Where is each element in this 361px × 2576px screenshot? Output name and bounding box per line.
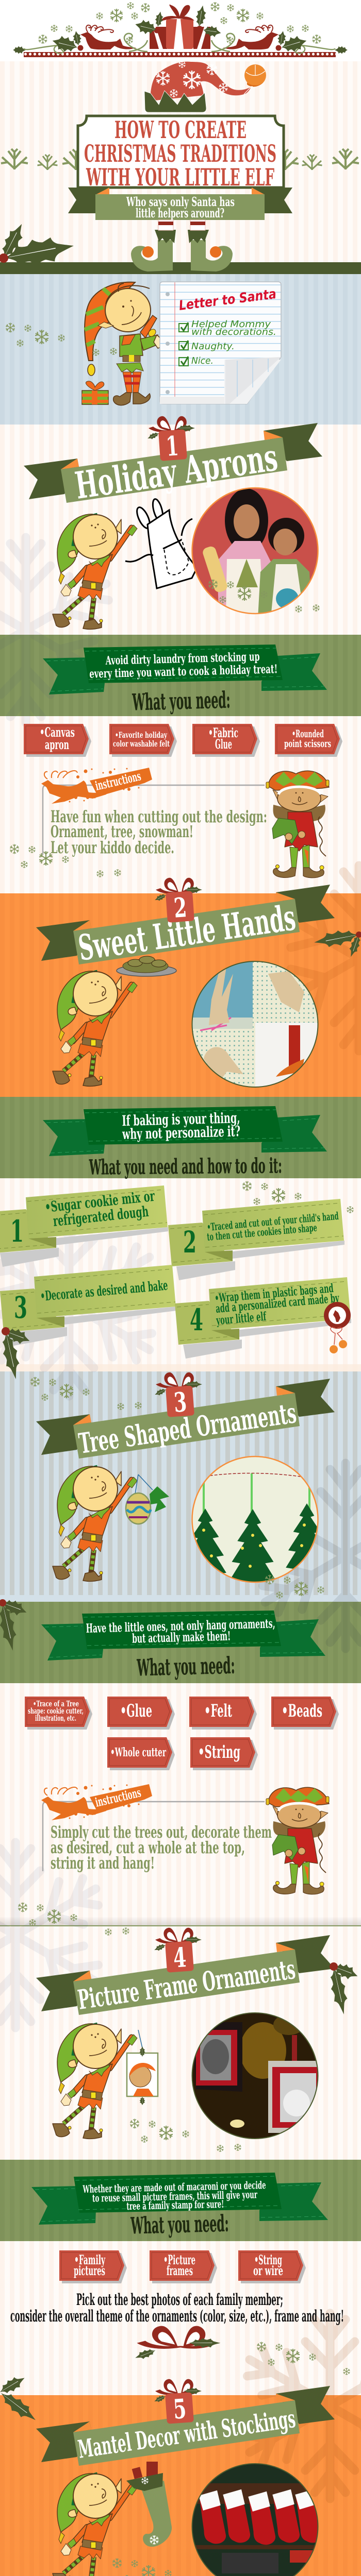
checklist [179,319,276,366]
infographic canvas: What you need: [132,687,231,716]
icon: large bow [133,2326,220,2362]
step 1: refrigerated dough [52,1203,150,1230]
step 2: 2 [183,1225,196,1260]
snowflakes [5,323,117,356]
section 1 intro ribbon: Avoid dirty laundry from stocking up [105,650,260,668]
letter to Santa [160,282,281,404]
icon: holly [313,927,361,958]
checklist: Nice. [191,355,214,366]
section 1 instructions [41,768,267,857]
section 3 material tags: illustration, etc. [35,1714,76,1723]
section 4 material tags: •Family [74,2252,106,2267]
checklist: with decorations. [191,327,276,337]
step 4: 4 [190,1302,203,1337]
section 3 material tags: •Beads [282,1701,322,1721]
section 4 number gift [153,1928,202,1974]
icon: small gift [82,381,108,404]
step 1: •Sugar cookie mix or [44,1188,156,1216]
section 4 intro ribbon [31,2173,328,2225]
elf with apron [53,514,137,629]
icon: wax seal with bells [324,1302,351,1353]
section 3 material tags: •String [198,1742,240,1762]
jester elf [266,771,329,878]
photo: girls in aprons [192,487,319,618]
subtitle ribbon: Who says only Santa has [126,194,235,209]
section 4 material tags: •Picture [163,2252,195,2267]
snowflakes [208,579,320,613]
section 3 instructions [41,1784,272,1873]
snowflakes [30,1377,142,1410]
section 2 intro ribbon [43,1106,327,1156]
section 1 material tags: •Favorite holiday [115,730,167,740]
snowflake [343,2368,350,2375]
step 3: •Decorate as desired and bake [40,1278,169,1304]
section 1 material tags: apron [45,737,69,752]
section 3 number gift: 3 [173,1386,188,1419]
title text [84,116,276,191]
section 3 material tags: •Whole cutter [110,1745,167,1759]
section 4 material tags: •String [254,2252,282,2267]
photo border [192,961,318,1087]
section 5 number gift: 5 [172,2393,187,2426]
section 3 material tags [25,1697,339,1770]
snowflakes [129,2119,241,2152]
icon: framed elf ornament [127,2030,158,2105]
photo border [192,1456,318,1582]
section 3 number gift [154,1372,202,1419]
icon: cookie plate [117,956,176,976]
title panel [78,116,284,191]
step 4 [175,1277,351,1359]
step 1 [0,1185,168,1267]
step 4: your little elf [216,1310,267,1328]
elf with stocking [53,2473,137,2576]
section 1 material tags [24,724,342,757]
subtitle ribbon [68,188,292,221]
section 4 material tags [59,2250,306,2283]
icon: holly [0,1596,29,1652]
section 1 material tags: •Fabric [208,725,238,740]
icon: elf boots [131,220,233,272]
elf with striped hat [82,282,165,405]
step 2 [168,1199,344,1280]
section 3 material tags: •Felt [204,1701,232,1721]
photo border [192,2013,318,2139]
section 1 instructions: Let your kiddo decide. [51,838,174,857]
section 1 material tags: •Canvas [40,725,75,740]
section 4 material tags: or wire [253,2263,283,2278]
section 1 instructions: instructions [94,768,142,793]
section 3 instructions: instructions [94,1785,142,1810]
section 1 intro ribbon [43,645,327,694]
elf with picture frame [53,2024,137,2139]
snowflakes [18,1902,129,1936]
section 1 material tags: Glue [215,737,232,752]
infographic canvas: What you need: [130,2211,229,2240]
section 3 intro ribbon: but actually make them! [132,1629,231,1646]
elf with ornament [53,1466,137,1581]
top ornament: gift, reindeer and holly border [13,2,348,57]
step 3 [0,1265,176,1346]
photo border [192,2464,318,2576]
section 1 material tags: •Rounded [292,727,324,740]
icon: hanging ornament and tree [126,1475,169,1524]
section 3 intro ribbon [41,1611,325,1660]
snowflakes [265,1574,324,1599]
section 2 number gift [154,878,202,924]
photo: picture frame ornaments [192,2012,319,2139]
jester elf [266,1787,329,1894]
decorative snowy branches [1,149,359,170]
photo border [192,488,318,614]
background: large faint snowflakes [0,537,361,2576]
section 2 number gift: 2 [173,892,188,924]
checklist: Naughty. [191,341,235,352]
elf with cookies [53,971,137,1086]
section 2 intro ribbon: why not personalize it? [122,1123,240,1143]
step 3: 3 [14,1290,27,1325]
icon: holly [0,2372,40,2426]
photo: mantel stockings [192,2463,322,2576]
title text: HOW TO CREATE [114,116,247,144]
section 3 instructions: string it and hang! [51,1853,155,1873]
icon: holly [0,1325,32,1381]
snowflakes [242,1181,354,1214]
section 4 material tags: frames [167,2263,193,2278]
icon: holly corner [0,221,76,271]
step 1: 1 [10,1214,24,1249]
section 1 instructions: Ornament, tree, snowman! [51,822,193,841]
icon: holly [326,1960,360,2016]
section 3 material tags: •Trace of a Tree [33,1699,79,1708]
section 4 number gift: 4 [172,1942,187,1974]
section 5 number gift [153,2379,202,2426]
section 3 instructions: as desired, cut a whole at the top, [51,1838,245,1857]
snowflakes [112,2558,224,2576]
snowflakes [9,844,121,877]
subtitle ribbon: little helpers around? [136,206,224,221]
section 4 material tags: pictures [74,2263,105,2278]
section 1 material tags: color washable felt [113,739,170,749]
checklist: Helped Mommy [191,319,271,330]
icon: apron outline [125,498,197,588]
infographic canvas: What you need: [136,1653,235,1681]
section 3 material tags: shape: cookie cutter, [28,1706,84,1716]
section 3 material tags: •Glue [120,1701,152,1721]
section 2 intro ribbon: If baking is your thing, [122,1109,240,1129]
section 4 intro ribbon: tree a family stamp for sure! [126,2198,224,2212]
icon: stocking with gifts [126,2462,172,2547]
letter heading: Letter to Santa [178,286,277,314]
snowflakes [256,2342,316,2366]
photo: hand cookies [192,961,319,1088]
section 1 number gift [146,416,195,463]
photo: tree ornaments [193,1457,318,1582]
section 1 number gift: 1 [165,430,179,463]
icon: elf hat with bell [144,61,266,112]
section 4 instruction text [10,2291,344,2326]
